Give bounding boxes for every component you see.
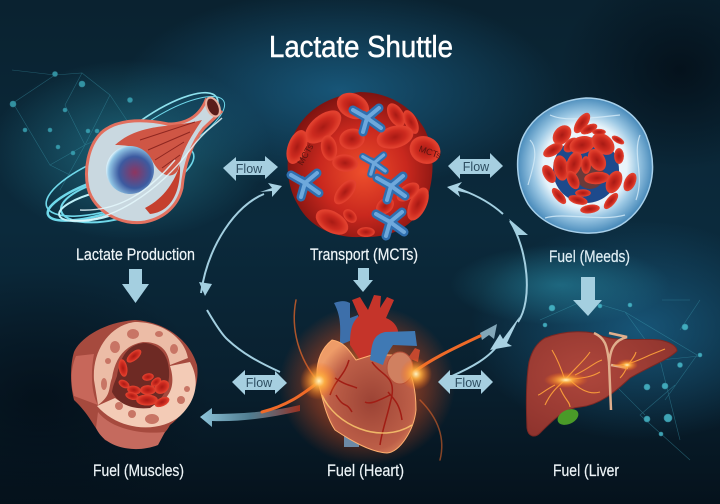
- title: Lactate Shuttle: [269, 29, 453, 64]
- flow arrow: lower left: Flow: [246, 376, 273, 390]
- down arrow: production to muscles: [122, 269, 149, 303]
- icon: heart: [317, 295, 420, 453]
- muscle fibres: [115, 120, 202, 175]
- down arrow: meeds to liver: [573, 277, 602, 316]
- network: upper left: [10, 70, 132, 190]
- cylinder shading: [72, 354, 98, 405]
- arc: lower left: [207, 310, 280, 372]
- flow arrow: lower right: [438, 370, 493, 394]
- down arrow: transport to heart: [353, 268, 373, 292]
- aorta and branches: [350, 295, 398, 360]
- flow arrow: lower right: Flow: [455, 376, 482, 390]
- hot spot right: [616, 359, 638, 371]
- label on cell: MCTs right: MCTs: [418, 144, 443, 161]
- flare: heart left: [300, 362, 338, 400]
- label: Fuel (Liver: Fuel (Liver: [553, 461, 619, 480]
- flow arrow: upper left: [223, 156, 278, 181]
- nucleus: [553, 137, 619, 203]
- membrane texture: [528, 115, 640, 218]
- icon: liver: [526, 332, 677, 436]
- small arrow: lower middle right: [480, 324, 497, 340]
- network: lower right: [540, 300, 702, 460]
- label: Lactate Production: Lactate Production: [76, 245, 195, 264]
- label: Fuel (Muscles): Fuel (Muscles): [93, 461, 184, 480]
- label: Fuel (Meeds): Fuel (Meeds): [549, 247, 630, 266]
- small arrow: upper right: [447, 182, 475, 197]
- gallbladder: [555, 406, 581, 428]
- heart body: [317, 340, 416, 453]
- muscle body: [87, 100, 221, 223]
- light streaks: [70, 118, 222, 220]
- glowing vessels right lobe: [613, 349, 665, 378]
- pulmonary artery: [370, 331, 417, 365]
- right atrium bulge: [387, 352, 413, 384]
- flow arrow: lower left: [232, 370, 287, 395]
- red blood cells: [540, 111, 639, 214]
- arc: upper right: [462, 190, 503, 214]
- nucleus core: [576, 161, 604, 189]
- arrowhead: upper left arc end: [199, 282, 212, 296]
- arrow: heart to muscles: [200, 405, 300, 427]
- ring pores: [101, 329, 190, 424]
- flare: heart right: [400, 358, 432, 390]
- sphere: [288, 92, 433, 237]
- coronary arteries: [330, 360, 402, 445]
- fibre lines: [140, 122, 195, 168]
- cylinder body: [71, 320, 198, 446]
- tendon opening: [203, 95, 223, 119]
- liver shape: [526, 332, 677, 436]
- red cells: [283, 89, 444, 239]
- icon: fuel cell with red blood cells: [518, 98, 653, 233]
- energy rings: [38, 77, 234, 231]
- circular flow arrows: [199, 190, 528, 376]
- pulmonary veins: [408, 348, 420, 362]
- red cells in lumen: [117, 347, 172, 409]
- icon: red blood cell transport sphere: [283, 89, 444, 239]
- flow arrow: upper right: [448, 153, 503, 179]
- label: Fuel (Heart): Fuel (Heart): [327, 461, 404, 480]
- cream ring top: [94, 322, 188, 405]
- inferior vena cava: [344, 425, 359, 447]
- lower muscle fibres: [145, 165, 180, 214]
- arc: upper left: [201, 194, 264, 293]
- small arrow: lower right: [490, 316, 520, 350]
- cream ring bottom: [97, 362, 196, 427]
- icon: muscle cell with lactate production: [38, 77, 234, 231]
- energy streak across heart: [262, 300, 480, 460]
- small arrow: upper left: [260, 183, 282, 197]
- label: Transport (MCTs): Transport (MCTs): [310, 245, 418, 264]
- glowing vessels left lobe: [538, 350, 602, 407]
- glow behind heart: [279, 305, 455, 465]
- flow arrow: upper left: Flow: [236, 162, 263, 176]
- label on cell: MCTs left: MCTs: [295, 142, 316, 167]
- arrowhead: right arc: [509, 219, 528, 235]
- lower fold: [96, 412, 165, 449]
- flow arrow: upper right: Flow: [463, 160, 490, 174]
- lumen: [112, 343, 169, 408]
- falciform ligament: [594, 333, 628, 410]
- light edge: [322, 395, 412, 433]
- nucleus ball: [106, 146, 154, 194]
- arc: lower right: [452, 342, 500, 376]
- MCT protein molecules: [291, 108, 405, 236]
- superior vena cava: [334, 301, 359, 345]
- outer membrane: [518, 98, 653, 233]
- hot spot left: [544, 372, 588, 388]
- arc: right: [510, 221, 527, 322]
- icon: muscle cross section: [71, 320, 198, 449]
